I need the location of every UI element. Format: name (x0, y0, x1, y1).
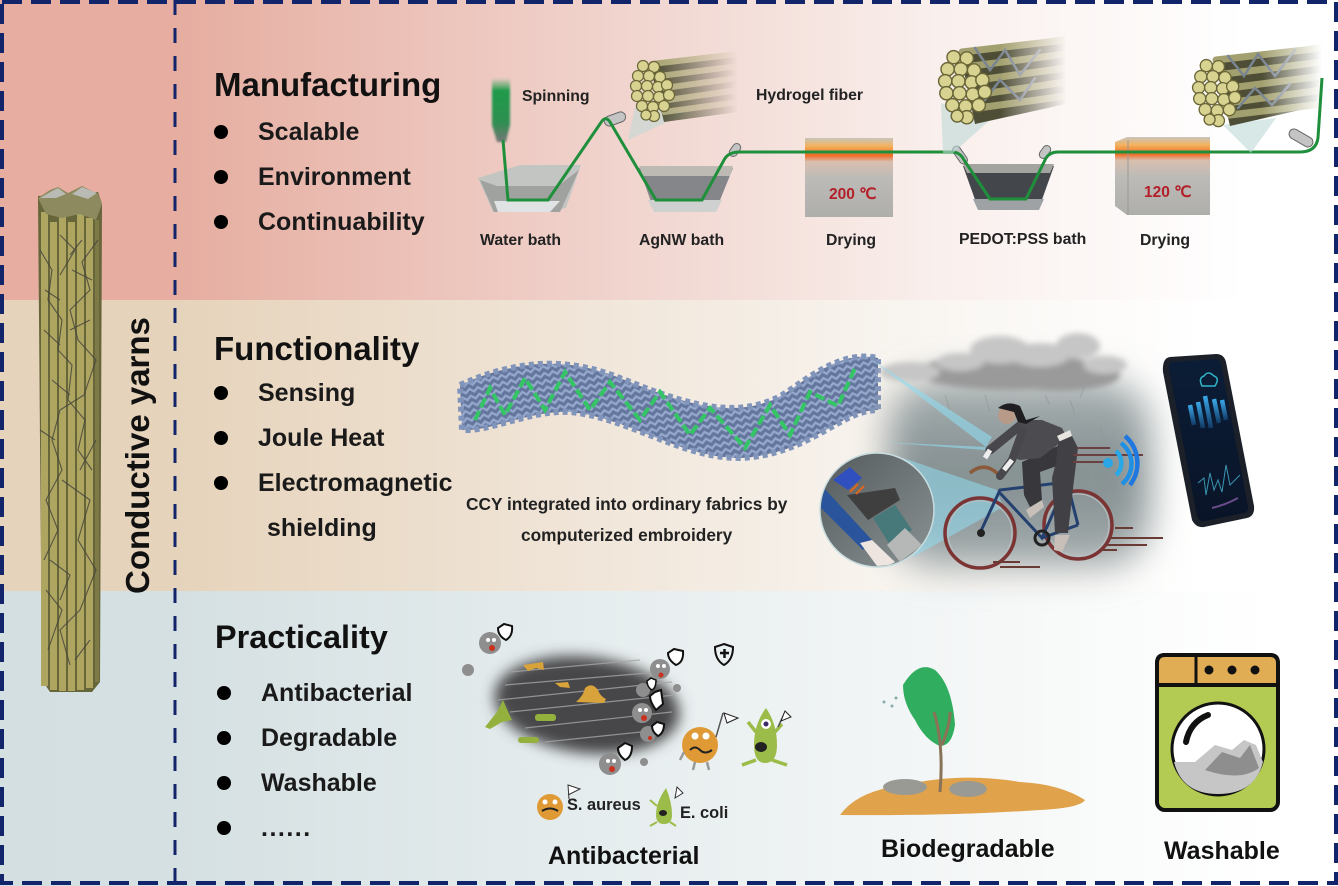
silver nanoparticle characters (462, 632, 681, 775)
icon: spinning nozzle (492, 78, 510, 142)
process labels: Drying (826, 232, 876, 249)
fiber blur ellipse (489, 646, 685, 764)
list: functionality points: Sensing (258, 379, 355, 407)
list: functionality points (214, 379, 453, 542)
list: practicality points (217, 679, 412, 842)
bicycle (945, 467, 1163, 568)
oven 120 C (1115, 137, 1210, 215)
list: manufacturing points: Scalable (258, 118, 360, 146)
icon: smartphone app (1163, 354, 1254, 527)
small S. aureus legend (537, 785, 580, 820)
title: Conductive yarns (vertical): Conductive yarns (119, 317, 156, 594)
conductive yarn illustration (38, 186, 102, 692)
antibacterial illustration: E. coli (680, 804, 728, 822)
antibacterial illustration (462, 624, 791, 870)
process labels: Drying (1140, 232, 1190, 249)
coated fiber bundle 2 (1193, 44, 1322, 153)
list: manufacturing points: Continuability (258, 208, 425, 236)
large S. aureus character (680, 713, 738, 770)
list: practicality points: Washable (261, 769, 377, 797)
oven 200 C (805, 138, 893, 217)
list: manufacturing points (214, 118, 425, 236)
speed lines and wifi icon (1073, 436, 1143, 485)
biodegradable illustration: tree on soil (840, 667, 1085, 863)
shields (498, 624, 733, 760)
caption: embroidery (466, 494, 788, 545)
list: manufacturing points: Environment (258, 163, 411, 191)
list: functionality points: Joule Heat (258, 424, 385, 452)
antibacterial illustration: Antibacterial (548, 842, 699, 870)
light beams (872, 360, 992, 450)
panel: manufacturing background (0, 0, 1338, 300)
biodegradable illustration: tree on soil: Biodegradable (881, 835, 1055, 863)
heading: Functionality: Functionality (214, 330, 420, 367)
panel: functionality background (0, 300, 1338, 591)
temperature labels: 200 ℃ (829, 186, 877, 203)
process diagram: spinning line (478, 36, 1322, 249)
fiber path (503, 78, 1322, 200)
large E. coli character (742, 708, 791, 765)
bacteria on fiber (523, 662, 606, 703)
heading: Manufacturing: Manufacturing (214, 66, 441, 103)
heading: Practicality: Practicality (215, 619, 388, 655)
inset detail circle (820, 453, 934, 570)
list: functionality points: shielding (267, 514, 377, 542)
process labels: Water bath (480, 232, 561, 249)
panel: practicality background (0, 591, 1338, 886)
small E. coli legend (650, 787, 683, 826)
list: practicality points: Antibacterial (261, 679, 412, 707)
rider (985, 403, 1078, 552)
process labels (480, 87, 1190, 249)
water bath (478, 165, 581, 212)
caption: embroidery: computerized embroidery (521, 525, 733, 545)
PEDOT:PSS bath (963, 164, 1054, 210)
washable illustration: washing machine: Washable (1164, 837, 1280, 865)
scene: cyclist in rain (820, 333, 1163, 570)
AgNW bath (639, 166, 733, 212)
hydrogel fiber bundle (628, 52, 738, 140)
process labels: PEDOT:PSS bath (959, 231, 1086, 248)
roller icons (603, 111, 1315, 165)
embroidery fabric pattern (460, 357, 878, 458)
list: practicality points: Degradable (261, 724, 397, 752)
antibacterial illustration: S. aureus (567, 796, 641, 814)
process labels: Spinning (522, 88, 590, 105)
list: practicality points: ...... (261, 814, 312, 842)
process diagram: spinning line: 120 ℃ (1144, 184, 1192, 201)
caption: embroidery: CCY integrated into ordinary fabrics by (466, 494, 788, 514)
list: functionality points: Electromagnetic (258, 469, 453, 497)
process labels: AgNW bath (639, 232, 724, 249)
rain (945, 385, 1105, 490)
washable illustration: washing machine (1157, 655, 1280, 865)
coated fiber bundle 1 (939, 36, 1066, 153)
process labels: Hydrogel fiber (756, 87, 863, 104)
cloud (880, 333, 1127, 391)
